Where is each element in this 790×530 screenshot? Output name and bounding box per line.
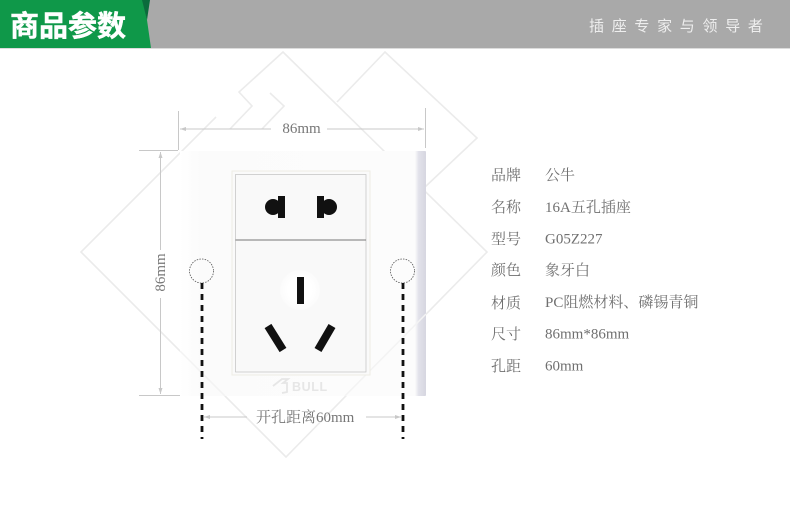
background diamonds	[81, 52, 487, 457]
spec: colour: 颜色	[491, 261, 521, 279]
specification table	[491, 167, 698, 375]
spec: size: 86mm*86mm	[545, 326, 630, 342]
spec: name: 名称	[491, 199, 522, 216]
spec: material	[491, 294, 698, 312]
spec: brand	[491, 167, 575, 184]
left mounting hole	[190, 259, 214, 439]
header bar	[0, 0, 790, 49]
header green tab	[0, 0, 151, 48]
right mounting hole	[390, 259, 414, 439]
spec: name: 16A五孔插座	[545, 198, 631, 216]
height dimension 86mm: 86mm	[153, 253, 169, 292]
spec: name	[491, 198, 631, 216]
spec: hole spacing	[491, 357, 584, 375]
three-pin holes	[268, 277, 332, 350]
three-pin button	[236, 240, 366, 372]
spec: model	[491, 230, 603, 248]
two-pin button	[236, 174, 366, 240]
spec: brand: 品牌	[491, 167, 521, 184]
spec: colour: 象牙白	[545, 262, 590, 279]
spec: colour	[491, 261, 590, 279]
slogan: 插座专家与领导者	[589, 18, 771, 35]
header tab fold	[142, 0, 150, 20]
spec: hole spacing: 孔距	[491, 357, 521, 375]
spec: brand: 公牛	[545, 167, 575, 184]
two-pin right hole	[317, 196, 337, 218]
hole spacing dimension: 开孔距离60mm	[256, 408, 355, 426]
BULL logo	[273, 379, 328, 394]
socket plate	[180, 151, 426, 396]
hole spacing dimension	[204, 408, 401, 426]
title: 商品参数	[10, 10, 126, 43]
height dimension 86mm	[139, 150, 180, 396]
width dimension 86mm: 86mm	[282, 121, 321, 137]
BULL logo: BULL	[292, 380, 328, 394]
spec: material: PC阻燃材料、磷锡青铜	[545, 294, 698, 311]
spec: model: 型号	[491, 230, 521, 248]
spec: size: 尺寸	[491, 326, 521, 343]
two-pin left hole	[265, 196, 285, 218]
spec: model: G05Z227	[545, 232, 603, 248]
width dimension 86mm	[178, 108, 426, 150]
spec: hole spacing: 60mm	[545, 358, 584, 374]
diamond lines showing through plate	[180, 314, 426, 396]
socket frame	[232, 171, 370, 375]
spec: material: 材质	[491, 295, 521, 312]
spec: size	[491, 326, 630, 343]
